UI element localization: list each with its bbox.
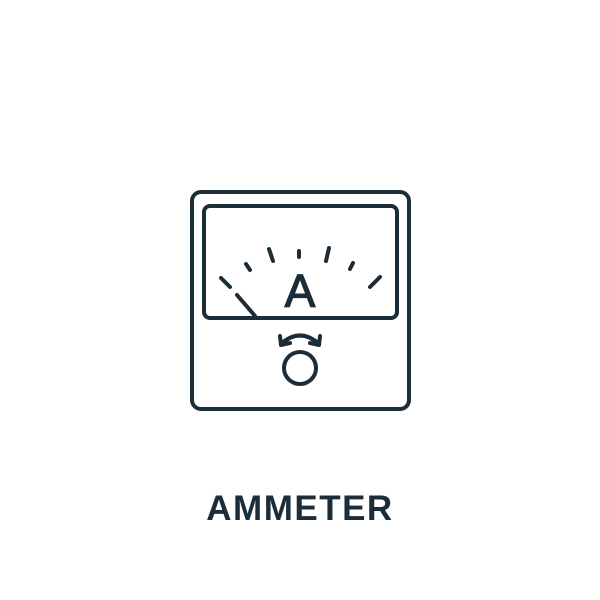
outer body (192, 192, 409, 409)
knob (284, 352, 316, 384)
needle (237, 295, 255, 316)
display window (204, 206, 397, 318)
letter A: A (285, 265, 316, 317)
adjustment arrow (280, 336, 320, 345)
title: AMMETER (206, 489, 394, 528)
scale ticks (221, 248, 380, 287)
